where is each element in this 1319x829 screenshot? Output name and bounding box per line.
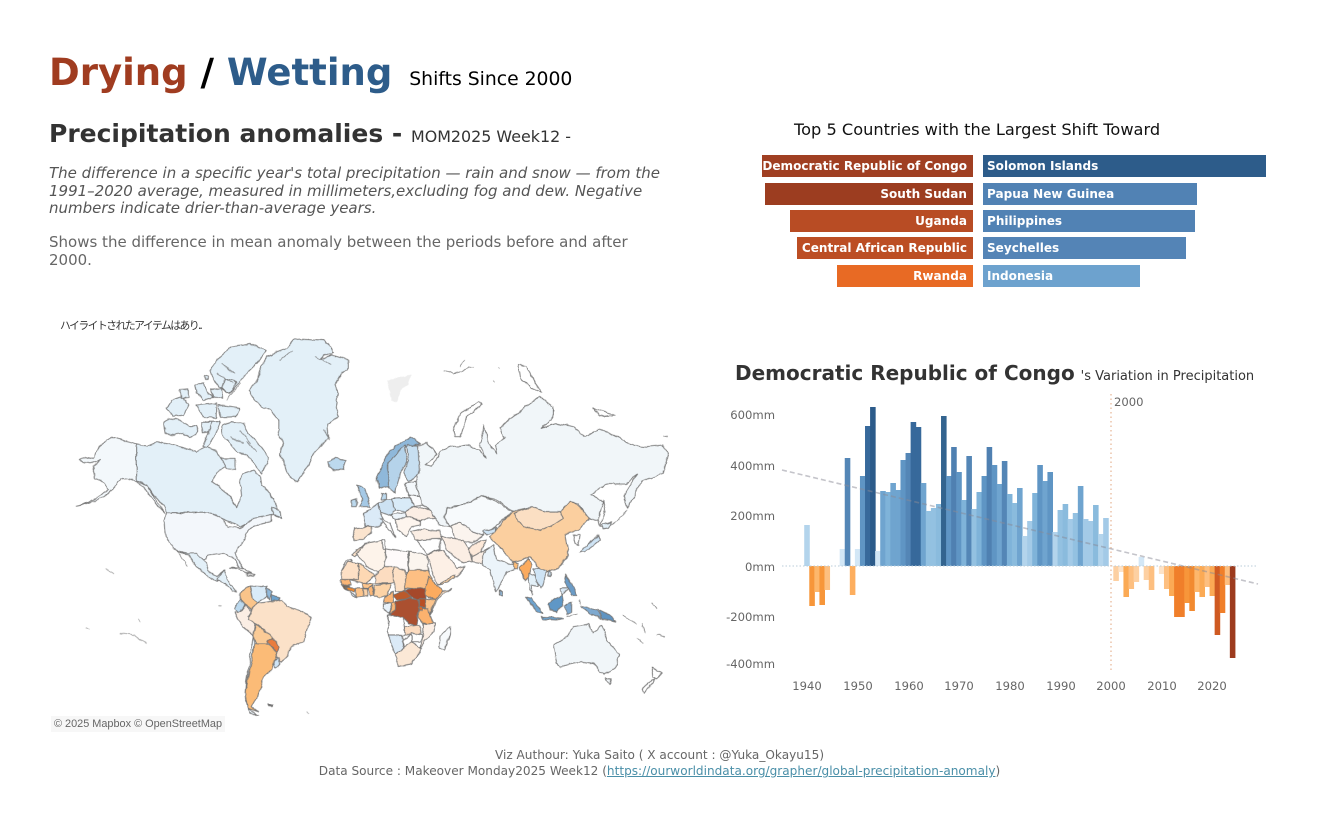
text block: method note: Shows the difference in mean anomaly between the periods before and after: [49, 233, 628, 251]
x axis labels: 2020: [1197, 679, 1227, 693]
map region: North America and Arctic: [77, 339, 348, 570]
bar chart: top 5 drying countries: Rwanda: [913, 269, 967, 283]
text block: definition: [49, 164, 660, 217]
footer credits: Data Source : Makeover Monday2025 Week12 (https://ourworldindata.org/grapher/global-precipitation-anomaly): [319, 764, 1000, 778]
text block: method note: 2000.: [49, 251, 92, 269]
x axis labels: 1960: [894, 679, 924, 693]
x axis labels: [792, 679, 1227, 693]
text block: definition: The difference in a specific year's total precipitation — rain and snow — from the: [49, 164, 660, 182]
bar chart: top 5 wetting countries: Philippines: [987, 214, 1062, 228]
map region: Latin America: [85, 551, 312, 716]
heading: precipitation anomalies: Precipitation anomalies - MOM2025 Week12 -: [49, 119, 571, 148]
y axis labels: [726, 408, 775, 671]
bar chart: top 5 wetting countries: [983, 155, 1266, 287]
bar chart: top 5 wetting countries: Seychelles: [987, 241, 1059, 255]
bar chart: top 5 drying countries: Democratic Republic of Congo: [762, 159, 967, 173]
y axis labels: 0mm: [745, 560, 775, 574]
map region: Eurasia: [352, 360, 668, 573]
bar chart: top 5 drying countries: [762, 155, 973, 287]
heading: top 5 countries: Top 5 Countries with the Largest Shift Toward: [794, 120, 1160, 139]
text block: method note: [49, 233, 628, 269]
chart heading: Democratic Republic of Congo 's Variation in Precipitation: [735, 361, 1254, 385]
title: Drying / Wetting Shifts Since 2000: [49, 51, 572, 94]
bar chart: top 5 wetting countries: Solomon Islands: [987, 159, 1098, 173]
bar chart: top 5 wetting countries: Papua New Guinea: [987, 187, 1114, 201]
y axis labels: -200mm: [726, 610, 775, 624]
x axis labels: 2000: [1096, 679, 1126, 693]
bar chart: top 5 wetting countries: Indonesia: [987, 269, 1053, 283]
map attribution: © 2025 Mapbox © OpenStreetMap: [54, 718, 222, 730]
bar chart: top 5 drying countries: Uganda: [915, 214, 967, 228]
text block: definition: 1991–2020 average, measured in millimeters,excluding fog and dew. Negative: [49, 182, 642, 200]
y axis labels: -400mm: [726, 657, 775, 671]
x axis labels: 1940: [792, 679, 822, 693]
map detail: Japan and Korea: [573, 522, 612, 552]
map region: Africa, Middle East, Asia-Pacific: [340, 529, 665, 693]
bar chart: top 5 drying countries: South Sudan: [880, 187, 967, 201]
reference line: year 2000: 2000: [1114, 395, 1144, 409]
footer credits: [319, 748, 1000, 778]
y axis labels: 200mm: [730, 509, 775, 523]
bars: [804, 407, 1235, 658]
y axis labels: 600mm: [730, 408, 775, 422]
map note: ハイライトされたアイテムはあり..: [60, 317, 201, 333]
x axis labels: 1970: [944, 679, 974, 693]
text block: definition: numbers indicate drier-than-average years.: [49, 199, 376, 217]
world map: [76, 338, 669, 716]
zero line: [782, 565, 1258, 567]
x axis labels: 2010: [1147, 679, 1177, 693]
bar chart: top 5 drying countries: Central African Republic: [802, 241, 967, 255]
bar chart: yearly precipitation variation: [726, 394, 1258, 693]
x axis labels: 1980: [995, 679, 1025, 693]
trend line: [782, 470, 1258, 584]
y axis labels: 400mm: [730, 459, 775, 473]
footer credits: Viz Authour: Yuka Saito ( X account : @Yuka_Okayu15): [495, 748, 824, 762]
x axis labels: 1950: [843, 679, 873, 693]
x axis labels: 1990: [1046, 679, 1076, 693]
